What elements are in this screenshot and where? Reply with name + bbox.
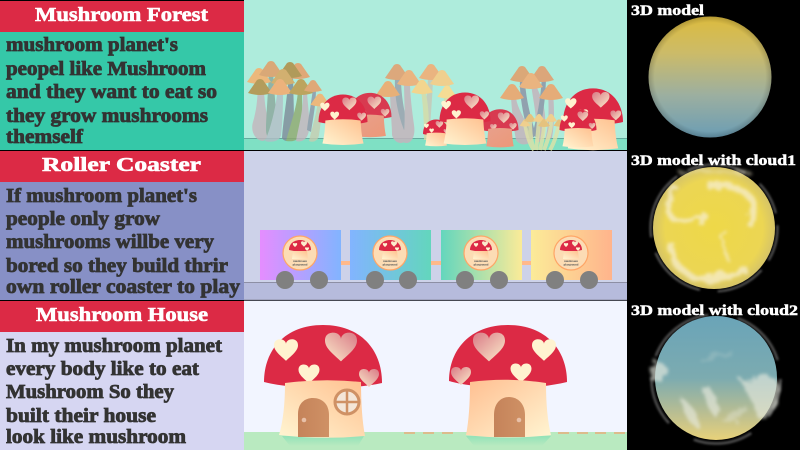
train connectors [341, 261, 532, 265]
thin mushroom cluster 3 [411, 64, 457, 140]
panel: 3D model [627, 0, 800, 150]
thin mushroom cluster 2 [376, 64, 421, 143]
text block: roller coaster description: bored so they build thrir [6, 255, 228, 277]
panel: 3D model with cloud2 [627, 301, 800, 450]
text block: forest description [6, 34, 217, 148]
train car 4 [531, 230, 612, 289]
thin mushroom cluster 5 yellow [520, 114, 564, 150]
heading: Roller Coaster: Roller Coaster [42, 154, 201, 176]
planet: blue sphere with clouds [651, 314, 780, 444]
red mushroom big right [563, 88, 623, 150]
label: 3D model with cloud2: 3D model with cloud2 [631, 303, 798, 319]
text block: house description: In my mushroom planet [6, 335, 222, 357]
heading: Mushroom Forest: Mushroom Forest [35, 4, 208, 26]
text block: roller coaster description [6, 185, 241, 298]
text block: roller coaster description: own roller coaster to play [6, 276, 241, 298]
panel: 3D model with cloud1 [627, 151, 800, 300]
panel: roller coaster illustration [244, 151, 627, 300]
panel: forest illustration [244, 0, 627, 150]
text block: house description: built their house [6, 405, 156, 427]
panel: Mushroom Forest text [0, 1, 244, 150]
panel: mushroom house illustration [244, 301, 627, 450]
red mushroom front centre [440, 92, 490, 145]
text block: house description [6, 335, 222, 448]
text block: roller coaster description: If mushroom planet's [6, 185, 197, 207]
text block: house description: look like mushroom [6, 426, 186, 448]
planet: yellow sphere with clouds [650, 164, 778, 292]
train car 1 [260, 230, 341, 289]
house 1 [264, 325, 382, 446]
text block: forest description: peopel like Mushroom [6, 58, 206, 80]
thin mushroom cluster 4 [500, 66, 563, 144]
text block: house description: every body like to eat [6, 358, 199, 380]
text block: forest description: mushroom planet's [6, 34, 178, 56]
red mushroom back left [348, 93, 392, 137]
red mushroom front left [318, 95, 368, 145]
house 2 [449, 325, 567, 446]
label: 3D model with cloud1: 3D model with cloud1 [631, 153, 796, 169]
train car 2 [350, 230, 431, 289]
heading: Mushroom House: Mushroom House [36, 304, 208, 326]
panel: Roller Coaster text [0, 151, 244, 300]
text block: forest description: and they want to eat so [6, 81, 217, 103]
path dashes [404, 432, 625, 434]
text block: roller coaster description: people only grow [6, 208, 160, 230]
text block: roller coaster description: mushrooms willbe very [6, 231, 215, 253]
text block: forest description: themself [6, 126, 84, 148]
thin mushroom cluster 1 [247, 61, 330, 142]
label: 3D model: 3D model [631, 3, 704, 19]
text block: forest description: they grow mushrooms [6, 105, 208, 127]
heading: Roller Coaster [0, 151, 244, 182]
planet: plain sphere [648, 16, 772, 138]
red mushroom back centre [482, 109, 518, 147]
panel: Mushroom House text [0, 301, 244, 450]
heading: Mushroom Forest [0, 1, 244, 32]
red mushroom front right [560, 109, 596, 147]
red mushroom small centre [423, 119, 449, 146]
heading: Mushroom House [0, 301, 244, 332]
train car 3 [441, 230, 522, 289]
text block: house description: Mushroom So they [6, 381, 175, 403]
